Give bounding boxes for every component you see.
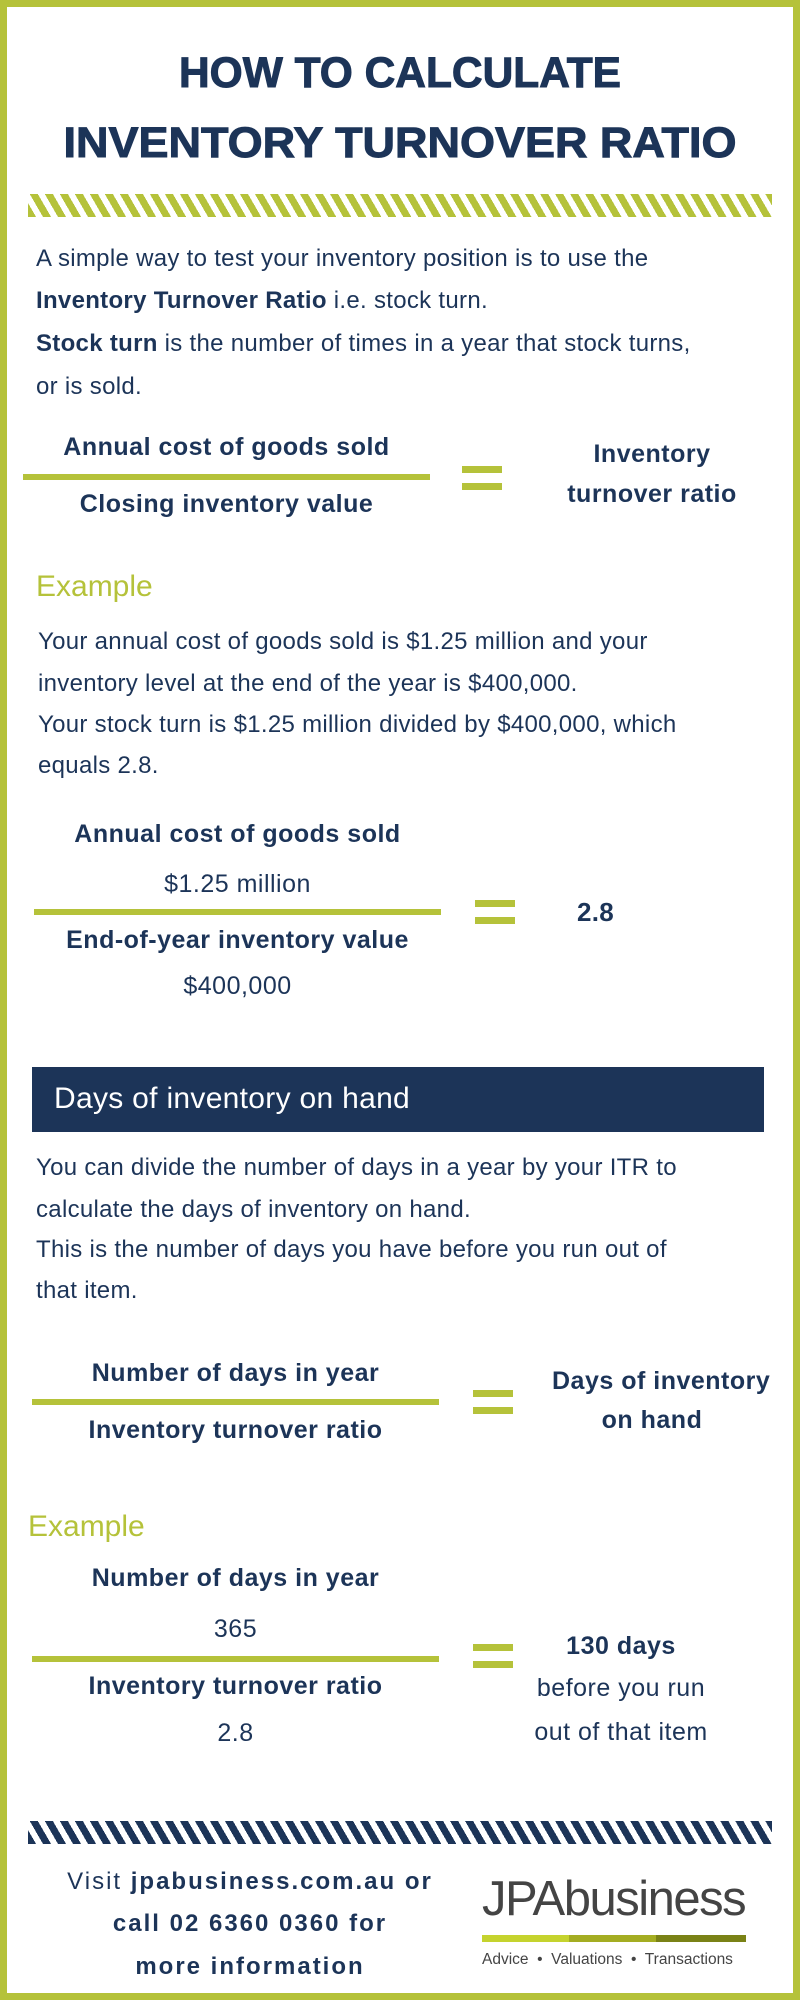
formula 2: $400,000 [183, 972, 292, 1000]
formula 4: out of that item [534, 1718, 708, 1746]
formula 3 [32, 1359, 770, 1444]
example heading 1: Example [36, 570, 153, 603]
title [64, 49, 736, 167]
section bar: days of inventory: Days of inventory on hand [54, 1082, 410, 1115]
footer contact text: more information [135, 1953, 365, 1980]
footer contact text: Visit jpabusiness.com.au or [67, 1868, 433, 1895]
example text: Your stock turn is $1.25 million divided by $400,000, which [38, 711, 677, 738]
formula 2: 2.8 [577, 897, 614, 927]
footer contact text [67, 1868, 433, 1980]
formula 1 [23, 433, 737, 518]
formula 3: Number of days in year [92, 1359, 379, 1387]
formula 2: End-of-year inventory value [66, 926, 409, 954]
formula 3: Days of inventory [552, 1367, 770, 1395]
example text [38, 628, 677, 779]
example text: Your annual cost of goods sold is $1.25 million and your [38, 628, 648, 655]
formula 1: Closing inventory value [80, 490, 373, 518]
formula 1: Inventory [593, 440, 711, 468]
days text: that item. [36, 1277, 138, 1304]
logo: Advice • Valuations • Transactions [482, 1951, 733, 1968]
formula 4: Inventory turnover ratio [88, 1672, 382, 1700]
formula 2: Annual cost of goods sold [74, 820, 401, 848]
title: HOW TO CALCULATE [179, 49, 621, 97]
intro text: or is sold. [36, 373, 142, 400]
example text: equals 2.8. [38, 752, 159, 779]
intro text: Inventory Turnover Ratio i.e. stock turn. [36, 287, 488, 314]
footer contact text: call 02 6360 0360 for [113, 1910, 387, 1937]
days text: calculate the days of inventory on hand. [36, 1196, 471, 1223]
intro text [36, 245, 691, 400]
formula 4: 365 [214, 1615, 257, 1643]
formula 2: $1.25 million [164, 870, 311, 898]
formula 4: before you run [537, 1674, 705, 1702]
days text: You can divide the number of days in a year by your ITR to [36, 1154, 677, 1181]
formula 1: turnover ratio [567, 480, 737, 508]
intro text: A simple way to test your inventory position is to use the [36, 245, 648, 272]
formula 1: Annual cost of goods sold [63, 433, 390, 461]
section bar: days of inventory [32, 1067, 764, 1132]
days text [36, 1154, 677, 1304]
formula 4 [32, 1564, 708, 1747]
intro text: Stock turn is the number of times in a year that stock turns, [36, 330, 691, 357]
title: INVENTORY TURNOVER RATIO [64, 119, 736, 167]
example heading 2: Example [28, 1510, 145, 1543]
example text: inventory level at the end of the year is $400,000. [38, 670, 578, 697]
formula 4: Number of days in year [92, 1564, 379, 1592]
formula 2 [34, 820, 614, 1000]
formula 3: on hand [602, 1406, 702, 1434]
formula 4: 130 days [566, 1632, 676, 1660]
logo [482, 1872, 746, 1968]
days text: This is the number of days you have before you run out of [36, 1236, 667, 1263]
formula 3: Inventory turnover ratio [88, 1416, 382, 1444]
logo: JPAbusiness [482, 1872, 745, 1926]
formula 4: 2.8 [217, 1719, 254, 1747]
